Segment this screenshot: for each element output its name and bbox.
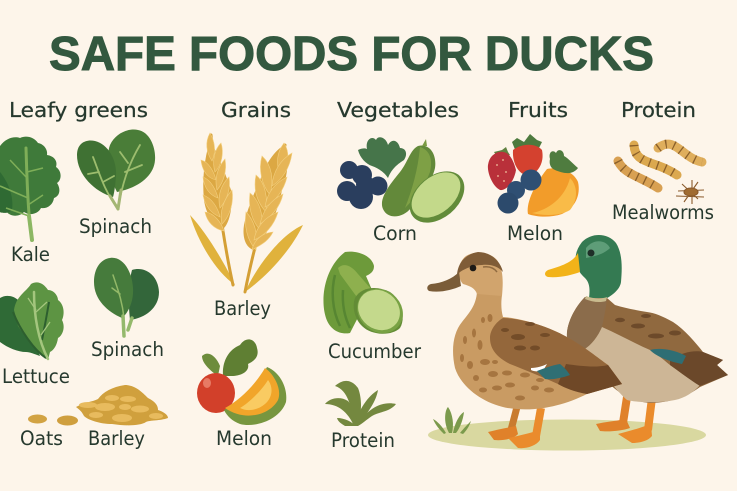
label: lettuce: Lettuce	[2, 365, 70, 388]
icon: apple with melon slice	[197, 339, 286, 425]
breast spots	[460, 314, 554, 400]
breast	[567, 297, 607, 350]
belly	[583, 327, 700, 402]
illustration: ducks on grass	[427, 235, 728, 450]
wing spots	[501, 322, 550, 350]
wing speculum	[650, 349, 686, 364]
legs and feet	[511, 407, 517, 430]
label: protein: Protein	[331, 429, 395, 452]
label: melon: Melon	[216, 427, 272, 450]
head	[459, 253, 503, 296]
insect	[676, 180, 704, 204]
label: corn: Corn	[373, 222, 417, 245]
icon: lettuce	[0, 282, 64, 360]
icon: cucumber	[323, 252, 412, 342]
tail feathers	[670, 351, 728, 386]
label: barley: Barley	[214, 297, 271, 320]
white wing patch	[531, 364, 547, 371]
icon: mixed fruits	[488, 134, 579, 217]
left ear body	[203, 140, 232, 228]
bill	[545, 253, 580, 277]
heading: protein: Protein	[621, 98, 696, 122]
icon: spinach bottom	[94, 258, 159, 336]
icon: oats and barley grains	[28, 385, 168, 426]
wing and back	[567, 297, 728, 403]
grass tuft	[433, 407, 471, 434]
heading: fruits: Fruits	[508, 98, 568, 122]
icon: blueberries, herb and cucumber	[337, 137, 474, 233]
icon: spinach top	[77, 130, 155, 209]
collar	[585, 296, 607, 302]
label: cucumber: Cucumber	[328, 340, 422, 363]
label: mealworms: Mealworms	[612, 201, 714, 224]
title: SAFE FOODS FOR DUCKS	[49, 28, 654, 81]
heading: leafy greens: Leafy greens	[9, 98, 148, 122]
male duck	[545, 235, 728, 443]
label: spinach top: Spinach	[79, 215, 152, 238]
female duck	[427, 252, 622, 448]
herb	[358, 137, 406, 178]
left stalk leaf	[190, 215, 235, 285]
eye	[588, 250, 594, 256]
eye	[470, 265, 476, 271]
right ear body	[243, 146, 287, 250]
label: barley grain: Barley	[88, 427, 145, 450]
wing	[490, 318, 622, 394]
legs and feet	[623, 397, 627, 423]
icon: kale	[0, 137, 61, 240]
bill	[427, 272, 461, 292]
icon: herb plant	[325, 381, 396, 426]
neck and head	[576, 235, 622, 298]
icon: mealworms and insect	[618, 144, 704, 204]
heading: grains: Grains	[221, 98, 291, 122]
heading: vegetables: Vegetables	[337, 98, 459, 122]
label: oats: Oats	[20, 427, 63, 450]
body	[453, 292, 622, 409]
ground	[428, 420, 706, 450]
label: kale: Kale	[11, 243, 50, 266]
label: spinach bottom: Spinach	[91, 338, 164, 361]
icon: barley stalks	[190, 133, 303, 292]
label: melon fruit: Melon	[507, 222, 563, 245]
right stalk leaf	[245, 225, 303, 292]
wing speculum	[537, 364, 570, 379]
